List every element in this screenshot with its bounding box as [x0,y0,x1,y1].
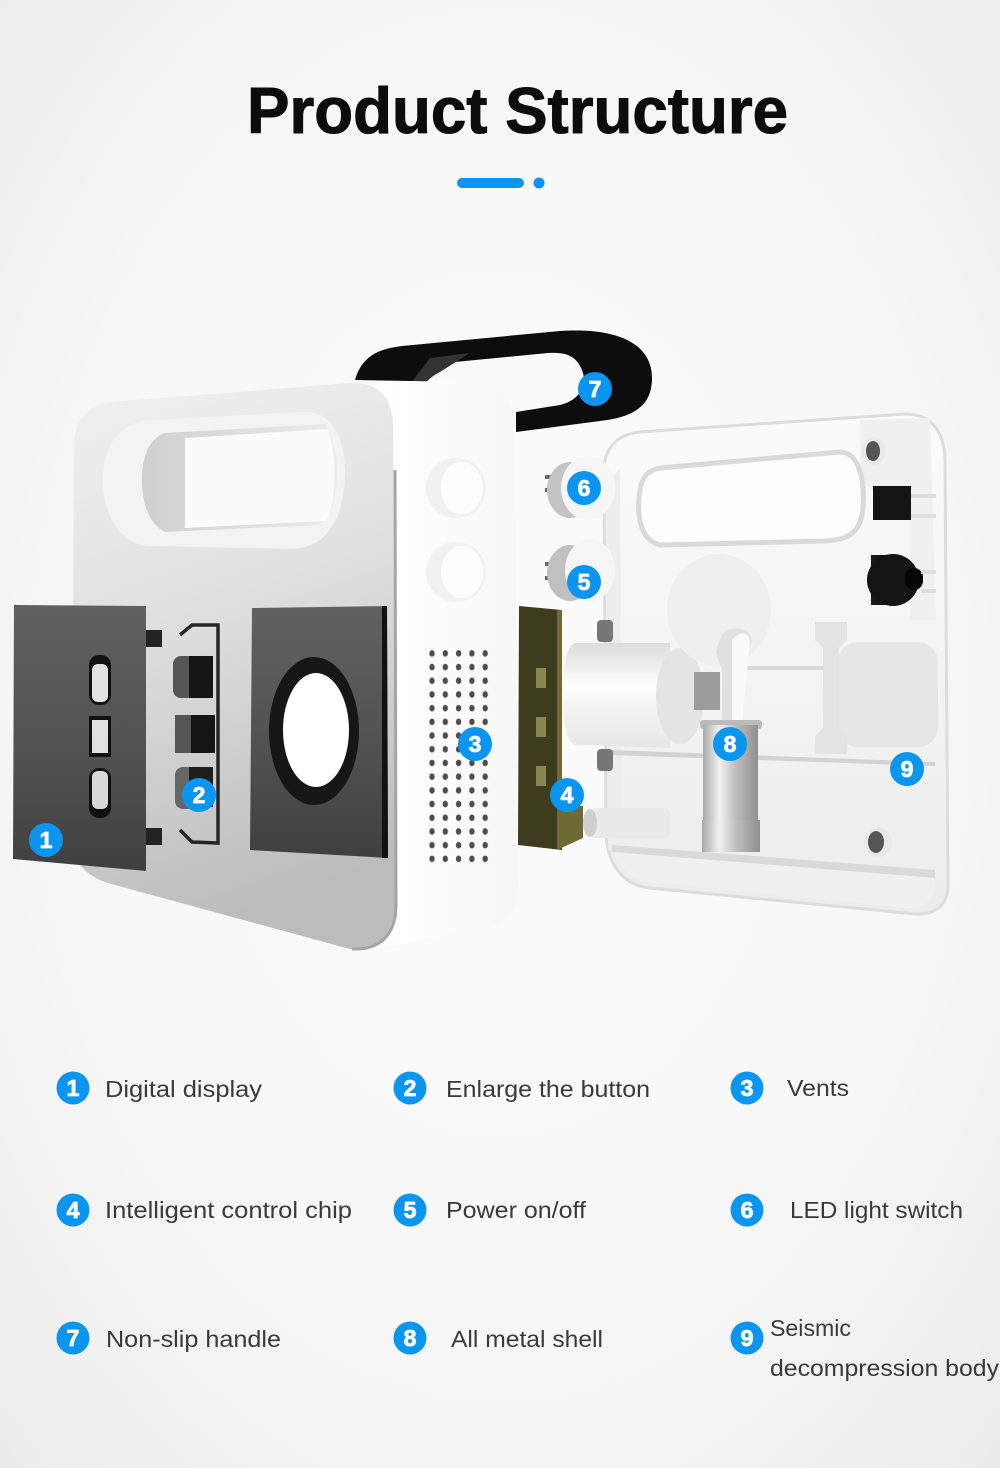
speaker panel [250,606,388,858]
marker 9 [890,752,924,786]
shell switches [867,486,936,606]
legend item 8 [394,1322,603,1354]
marker 8: 8 [724,731,737,757]
component switch 6 [545,456,615,520]
handle opening [103,412,345,549]
legend item 2: Enlarge the button [446,1076,650,1102]
marker 6 [567,471,601,505]
control chip board [518,606,583,850]
front edge highlight [352,470,396,949]
digital display panel [13,605,162,871]
legend item 9 [730,1315,999,1381]
side round buttons [426,458,486,602]
legend item 1 [56,1072,262,1104]
legend item 7: 7 [67,1325,79,1351]
marker 7 [578,372,612,406]
legend item 7 [56,1322,281,1354]
legend item 2 [394,1072,650,1104]
legend item 6: 6 [741,1197,753,1223]
legend item 4: Intelligent control chip [105,1197,352,1223]
marker 3: 3 [469,731,481,757]
legend item 8: All metal shell [451,1326,603,1352]
black non-slip handle [355,330,652,432]
marker 2: 2 [193,782,205,808]
legend item 5: 5 [404,1197,417,1223]
back shell [583,414,948,914]
marker 5 [567,565,601,599]
legend item 6: LED light switch [790,1197,963,1223]
vents [426,646,492,866]
marker 1 [29,823,63,857]
legend item 4 [56,1194,352,1226]
metal shell [700,720,762,852]
legend item 1: Digital display [105,1076,262,1102]
main body front face [72,383,396,949]
marker 5: 5 [578,569,591,595]
product diagram [13,330,948,951]
marker 8 [713,727,747,761]
marker 2 [182,778,216,812]
legend item 6 [730,1194,963,1226]
main body side panel [355,380,518,951]
component switch 5 [545,539,615,601]
legend item 3: Vents [787,1075,849,1101]
legend item 4: 4 [67,1197,80,1223]
legend item 8: 8 [404,1325,417,1351]
legend [56,1072,999,1381]
legend item 9: decompression body [770,1355,999,1381]
motor cylinder and disc [563,554,771,771]
enlarged buttons [173,625,218,843]
legend item 5 [394,1194,586,1226]
legend item 2: 2 [404,1075,416,1101]
legend item 5: Power on/off [446,1197,586,1223]
marker 1: 1 [40,827,53,853]
legend item 3 [730,1072,849,1104]
title: Product Structure [247,74,788,147]
legend item 9: 9 [741,1325,753,1351]
marker 6: 6 [578,475,590,501]
marker 9: 9 [901,756,913,782]
title accent: blue bar and dot [457,178,544,188]
legend item 1: 1 [67,1075,80,1101]
marker 7: 7 [589,376,601,402]
marker 4 [550,778,584,812]
marker 4: 4 [561,782,574,808]
legend item 7: Non-slip handle [106,1326,281,1352]
legend item 9: Seismic [770,1315,851,1341]
legend item 3: 3 [741,1075,753,1101]
marker 3 [458,727,492,761]
